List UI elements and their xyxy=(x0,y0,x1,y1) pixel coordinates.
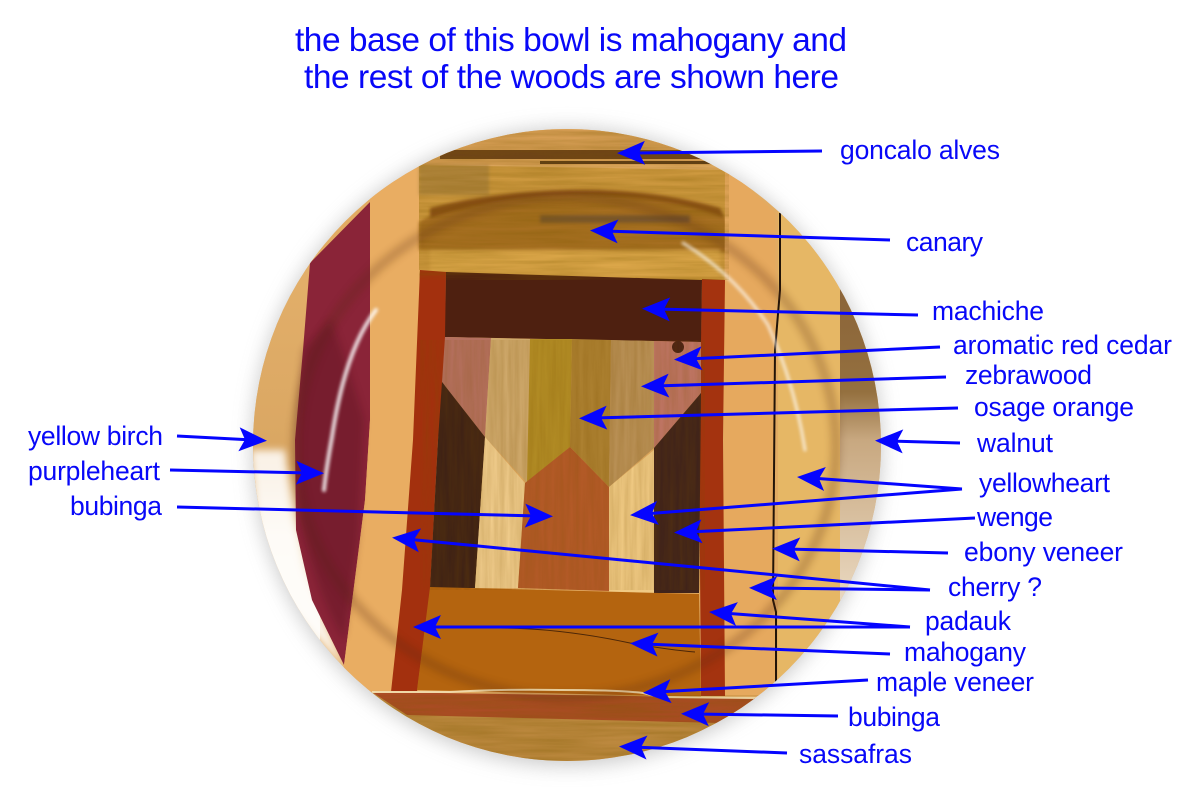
bubinga bottom xyxy=(372,692,756,723)
title: the base of this bowl is mahogany and xyxy=(295,22,847,59)
top grain xyxy=(419,130,729,280)
yellowheart left xyxy=(475,437,525,588)
label: cherry ?: cherry ? xyxy=(948,572,1042,602)
vertical grain xyxy=(420,340,705,590)
machiche xyxy=(445,272,702,342)
wenge left xyxy=(430,382,485,588)
arrow: goncalo alves xyxy=(631,151,822,153)
arrow: ebony veneer xyxy=(786,549,948,553)
arrow: sassafras xyxy=(633,747,787,753)
horizontal grain xyxy=(372,695,762,765)
mahogany crack xyxy=(500,628,695,652)
arrow: aromatic red cedar xyxy=(688,347,940,359)
osage orange right xyxy=(570,339,611,487)
purpleheart strip xyxy=(295,202,370,665)
arrow: purpleheart xyxy=(170,470,310,473)
label: machiche: machiche xyxy=(932,296,1044,326)
glare right xyxy=(683,243,805,450)
label: bubinga left: bubinga xyxy=(70,491,162,521)
canary block xyxy=(419,165,730,282)
sassafras xyxy=(371,692,756,761)
label: maple veneer: maple veneer xyxy=(876,667,1034,697)
drop shadow of bowl xyxy=(253,129,881,765)
arrow: yellowheart centre xyxy=(644,489,962,514)
top cap goncalo alves xyxy=(422,129,712,165)
label: sassafras: sassafras xyxy=(799,739,912,769)
mahogany xyxy=(417,587,701,697)
label: mahogany: mahogany xyxy=(904,637,1027,667)
label: padauk: padauk xyxy=(925,606,1012,636)
label: purpleheart: purpleheart xyxy=(28,456,161,486)
label: goncalo alves: goncalo alves xyxy=(840,135,1000,165)
arrow: padauk right xyxy=(723,613,910,627)
label: yellowheart: yellowheart xyxy=(979,468,1111,498)
white glare lower left xyxy=(250,450,345,670)
yellowheart centre right xyxy=(609,450,654,593)
arrow: padauk left xyxy=(427,626,910,628)
yellowheart strip right xyxy=(778,211,840,679)
zebrawood left xyxy=(485,338,530,483)
arrow: wenge xyxy=(688,518,975,532)
arrow: yellow birch xyxy=(177,436,253,440)
padauk right xyxy=(699,279,725,696)
arrow: maple veneer xyxy=(657,680,868,692)
cherry strip left xyxy=(344,165,420,692)
zebrawood right xyxy=(609,340,654,487)
arrow: cherry right xyxy=(763,588,930,590)
yellow birch strip xyxy=(253,250,320,640)
title xyxy=(295,22,847,96)
purple inner shadow xyxy=(297,320,364,640)
arrow: machiche xyxy=(656,309,918,315)
label: ebony veneer: ebony veneer xyxy=(964,537,1123,567)
arrow: bubinga bottom xyxy=(695,714,838,716)
aromatic red cedar left xyxy=(442,337,491,437)
title: the rest of the woods are shown here xyxy=(304,59,839,96)
padauk left xyxy=(391,270,446,692)
label: osage orange: osage orange xyxy=(974,392,1134,422)
arrow: canary xyxy=(604,231,890,240)
cedar knot xyxy=(672,341,684,353)
label: canary: canary xyxy=(906,227,984,257)
arrow: walnut xyxy=(889,441,960,443)
ebony veneer xyxy=(773,213,780,696)
osage orange left xyxy=(527,339,572,483)
arrow: osage orange xyxy=(593,408,958,418)
cherry strip right xyxy=(723,165,775,696)
label: yellow birch: yellow birch xyxy=(28,421,163,451)
goncalo stripes xyxy=(440,150,730,164)
arrow: cherry left xyxy=(406,539,930,590)
aromatic red cedar right xyxy=(654,341,701,448)
walnut strip xyxy=(840,289,881,600)
label: aromatic red cedar: aromatic red cedar xyxy=(953,330,1172,360)
maple veneer xyxy=(372,690,756,698)
arrow: mahogany xyxy=(644,644,890,654)
label: zebrawood: zebrawood xyxy=(965,360,1092,390)
glare left xyxy=(324,310,376,490)
canary figure xyxy=(419,165,730,276)
label: bubinga right: bubinga xyxy=(848,702,940,732)
wooden bowl photo xyxy=(250,125,890,770)
arrows xyxy=(170,151,975,753)
wenge right xyxy=(654,393,701,593)
bubinga centre xyxy=(518,447,609,591)
bowl rim shading xyxy=(296,197,836,697)
label: wenge: wenge xyxy=(976,502,1053,532)
arrow: bubinga left xyxy=(177,507,539,516)
label: walnut: walnut xyxy=(976,428,1054,458)
labels xyxy=(28,135,1172,769)
arrow: yellowheart right xyxy=(811,478,962,489)
arrow: zebrawood xyxy=(655,377,946,386)
base wood xyxy=(250,125,890,765)
